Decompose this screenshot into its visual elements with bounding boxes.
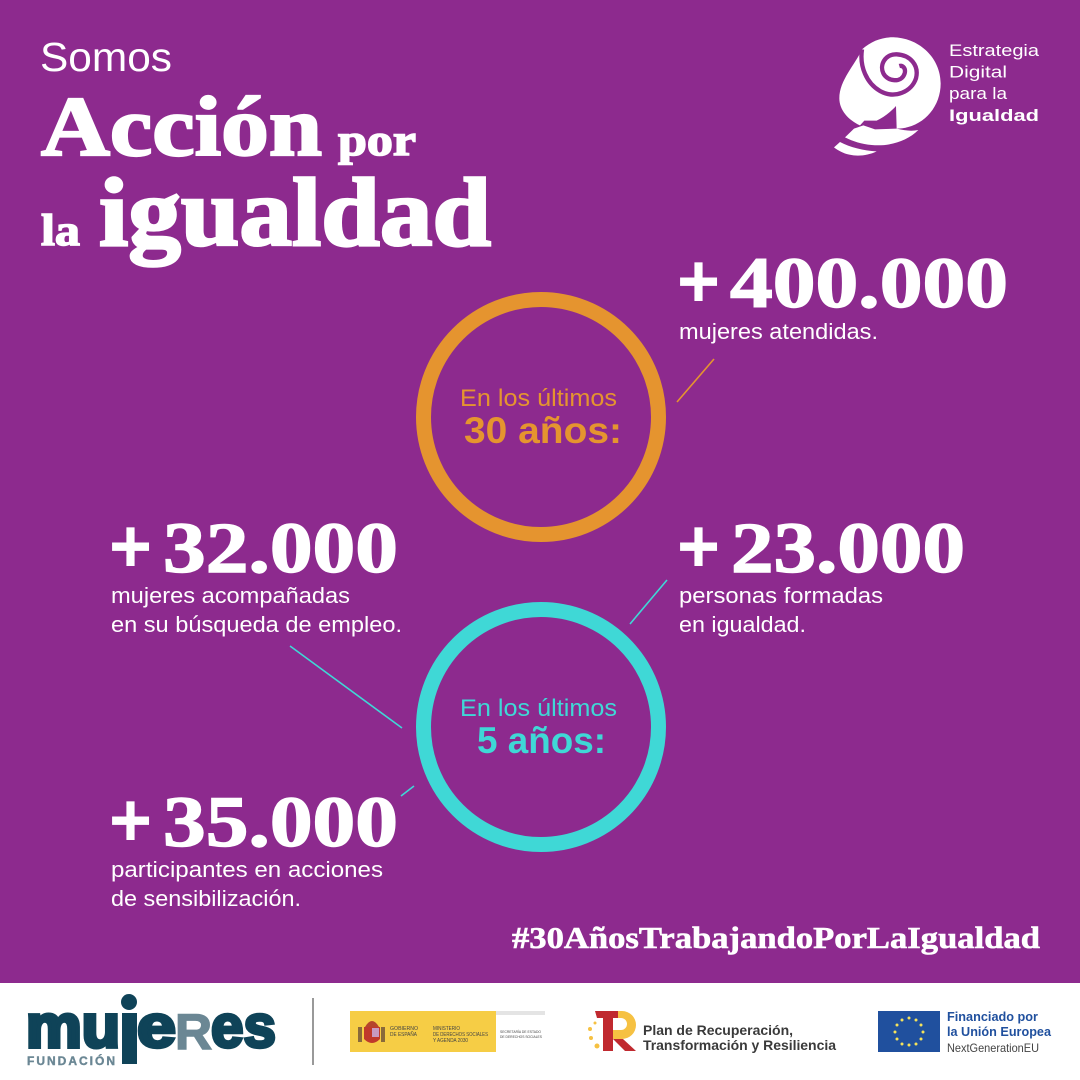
stat: 23.000 people: en igualdad. [679, 612, 806, 637]
logo: Gobierno de España: GOBIERNO [390, 1026, 418, 1032]
stat: 35.000 participants: participantes en acciones [111, 857, 383, 882]
connectors: teal [290, 580, 667, 796]
stat: 400.000 women: 400.000 [730, 243, 1008, 323]
logo: European Union: Financiado por [947, 1009, 1038, 1024]
icon: coat of arms [358, 1021, 385, 1043]
logo: Fundación Mujeres: mu [26, 993, 120, 1060]
logo: European Union: NextGenerationEU [947, 1041, 1039, 1055]
connector: orange [677, 359, 714, 402]
logo: Gobierno de España: DE ESPAÑA [390, 1031, 417, 1038]
stat: 32.000 women: 32.000 [163, 508, 398, 588]
logo: Gobierno de España: SECRETARÍA DE ESTADO [500, 1029, 541, 1034]
title: igualdad [99, 159, 491, 266]
circle: 5 years: 5 años: [477, 720, 606, 761]
title [40, 34, 491, 266]
stat: 400.000 women: + [677, 239, 720, 324]
logo: Gobierno de España: DE DERECHOS SOCIALES [433, 1032, 488, 1038]
logo: Gobierno de España: MINISTERIO [433, 1026, 460, 1032]
logo: Fundación Mujeres: R [175, 1004, 212, 1060]
logo wordmark: para la [949, 84, 1008, 103]
stat: 35.000 participants: + [109, 778, 152, 863]
logo: European Union [878, 1009, 1052, 1055]
stat: 23.000 people: 23.000 [731, 508, 965, 588]
logo wordmark: Igualdad [949, 106, 1039, 125]
stat: 32.000 women: mujeres acompañadas [111, 583, 350, 608]
stat: 23.000 people: personas formadas [679, 583, 883, 608]
logo: Plan de Recuperación: Transformación y Resiliencia [643, 1037, 836, 1053]
icon: spiral shell [834, 37, 941, 156]
title: la [41, 206, 80, 255]
footer band [0, 983, 1080, 1080]
stat: 35.000 participants [109, 778, 398, 911]
logo: Fundación Mujeres [26, 993, 276, 1068]
logo: Estrategia Digital para la Igualdad [834, 37, 1040, 156]
stat: 35.000 participants: 35.000 [163, 782, 398, 862]
circle: 30 years [424, 300, 658, 534]
stat: 23.000 people: + [677, 504, 720, 589]
logo: Gobierno de España [350, 1011, 545, 1052]
logo: Gobierno de España: Y AGENDA 2030 [433, 1038, 468, 1044]
stat: 400.000 women: mujeres atendidas. [679, 319, 878, 344]
logo wordmark: Estrategia [949, 41, 1040, 60]
divider [312, 998, 314, 1065]
logo: European Union: la Unión Europea [947, 1024, 1052, 1039]
title: por [338, 116, 416, 165]
logo: Fundación Mujeres: es [211, 993, 276, 1060]
title: Somos [40, 34, 172, 80]
stat: 32.000 women: + [109, 504, 152, 589]
logo wordmark: Digital [949, 62, 1007, 82]
stat: 32.000 women: en su búsqueda de empleo. [111, 612, 402, 637]
title: Acción [41, 80, 322, 174]
logo: Fundación Mujeres: FUNDACIÓN [27, 1053, 115, 1068]
stat: 32.000 women [109, 504, 402, 637]
circle: 5 years: En los últimos [460, 695, 617, 722]
stat: 400.000 women [677, 239, 1008, 344]
stat: 35.000 participants: de sensibilización. [111, 886, 301, 911]
logo: Fundación Mujeres: e [137, 993, 176, 1060]
stat: 23.000 people [677, 504, 965, 637]
logo: Plan de Recuperación: Plan de Recuperación, [643, 1022, 793, 1038]
icon: EU flag [878, 1011, 940, 1052]
logo wordmark [949, 41, 1040, 125]
circle: 5 years [424, 610, 658, 844]
circle: 30 years: En los últimos [460, 385, 617, 412]
icon: TR [588, 1011, 636, 1051]
logo: Plan de Recuperación [588, 1011, 836, 1053]
logo: Gobierno de España: DE DERECHOS SOCIALES [500, 1034, 542, 1039]
hashtag: #30AñosTrabajandoPorLaIgualdad [512, 920, 1040, 955]
circle: 30 years: 30 años: [464, 410, 622, 451]
